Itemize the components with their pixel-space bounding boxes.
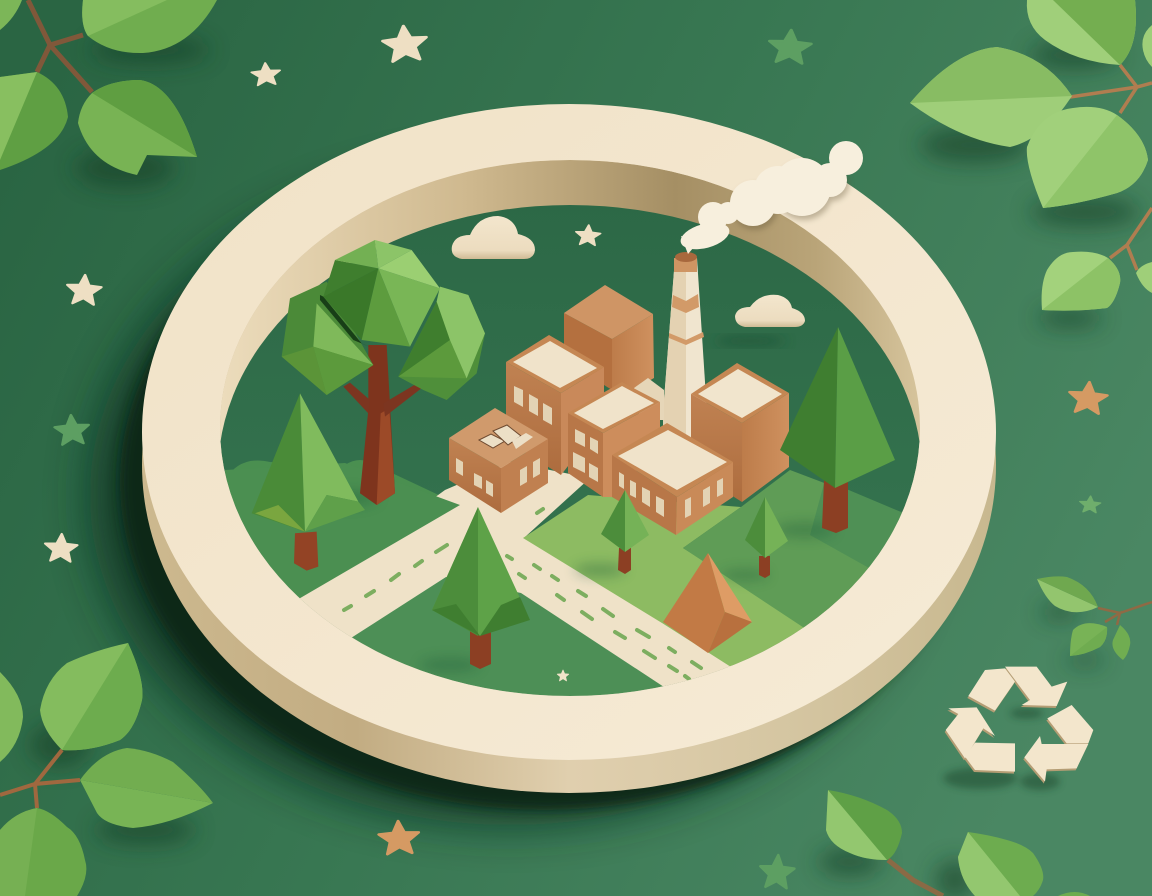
grass patch: left (225, 463, 460, 604)
shadow under cloud (724, 335, 776, 347)
leaf (0, 808, 86, 896)
leaf (1027, 107, 1148, 208)
crown: left (282, 282, 373, 395)
grass patch: light (523, 495, 806, 666)
leaf (82, 0, 217, 53)
smoke (678, 141, 863, 254)
building: small front-left (449, 408, 548, 513)
road (298, 462, 732, 696)
small star on floor (557, 670, 569, 681)
large broadleaf tree (252, 240, 485, 571)
leaves: top right (910, 0, 1152, 311)
small structure behind chimney (634, 378, 664, 420)
ring cast shadow (90, 154, 970, 825)
leaf (1042, 252, 1120, 311)
branch (0, 750, 80, 808)
cloud: left (452, 216, 535, 259)
hills (234, 460, 438, 534)
leaves: bottom left (0, 643, 213, 896)
building: left tall (506, 335, 604, 475)
leaf (80, 748, 213, 828)
pine tree: small left (601, 490, 649, 574)
ring side (142, 137, 996, 793)
road dashes (344, 509, 701, 679)
grass patch: medium (684, 470, 902, 628)
building: back (564, 285, 654, 402)
icon: recycle symbol (943, 667, 1093, 790)
tree ground shadows (322, 490, 835, 672)
pine tree: small right (745, 497, 788, 578)
leaves: bottom right (826, 790, 1090, 896)
cloud: right (735, 295, 805, 327)
leaf (78, 80, 197, 175)
leaves: right middle (1037, 576, 1152, 660)
building: front (612, 423, 733, 535)
star: inside ring (575, 224, 601, 246)
pine tree: left (252, 393, 365, 571)
chimney (663, 252, 707, 440)
building: right (691, 363, 789, 502)
branch (28, 0, 92, 92)
pine tree: centre (432, 507, 530, 669)
factory buildings (449, 141, 863, 535)
crown: top (320, 240, 440, 348)
leaf (1027, 0, 1136, 65)
scene ground (220, 205, 920, 696)
leaf (0, 72, 68, 170)
trunk and branches (343, 345, 430, 505)
crown: right (398, 287, 485, 400)
paper tent (663, 553, 752, 653)
branch (1070, 65, 1152, 270)
ring inner wall (220, 160, 920, 696)
floor (220, 205, 920, 696)
building: middle (568, 382, 660, 497)
pine tree: right (780, 327, 895, 533)
leaf (910, 47, 1072, 147)
leaves: top left (0, 0, 217, 175)
ring top face (142, 104, 996, 760)
grass patch: right strip (810, 486, 902, 568)
grass patch: bottom (352, 577, 663, 696)
leaf (40, 643, 142, 750)
